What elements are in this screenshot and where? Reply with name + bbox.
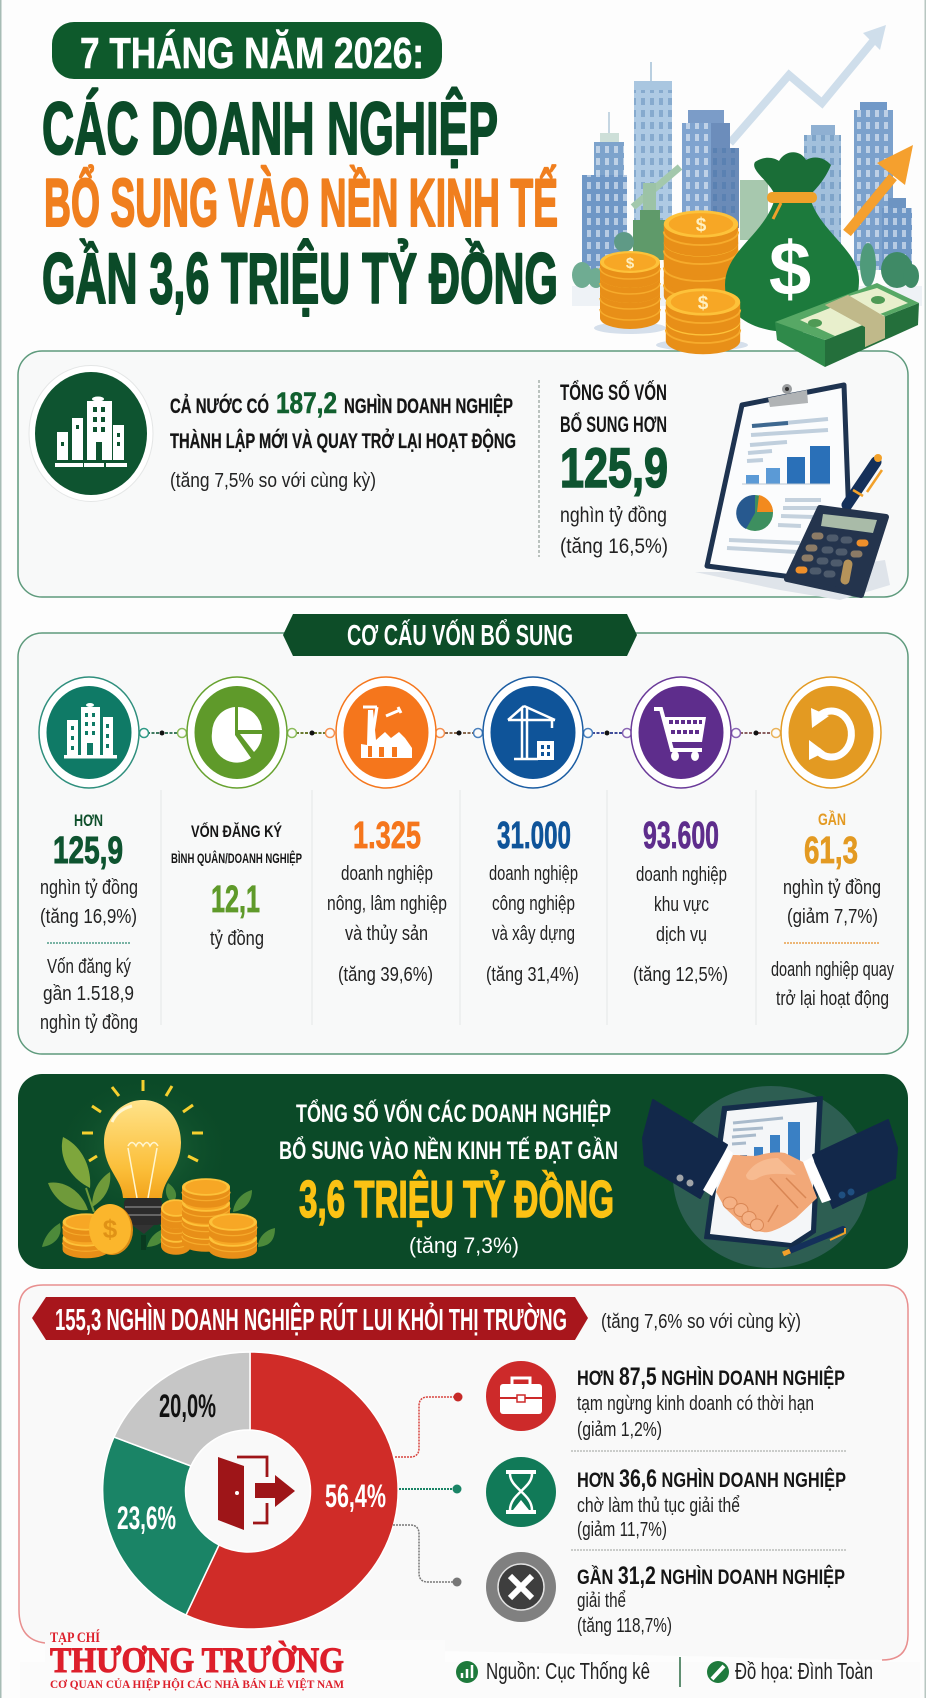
text: new business count: THÀNH LẬP MỚI VÀ QUAY TRỞ LẠI HOẠT ĐỘNG [170,429,516,453]
heading ribbon [32,1297,588,1340]
text: awaiting dissolution: chờ làm thủ tục giải thể [577,1495,740,1517]
logo: Thuong Truong magazine [50,1629,344,1691]
main title: GẦN 3,6 TRIỆU TỶ ĐỒNG [42,239,558,319]
logo: Thuong Truong magazine: CƠ QUAN CỦA HIỆP HỘI CÁC NHÀ BÁN LẺ VIỆT NAM [50,1677,344,1691]
text: total added capital: TỔNG SỐ VỐN [560,379,667,405]
text: new business count: CẢ NƯỚC CÓ [170,394,269,418]
main title [42,87,558,319]
text: total capital: TỔNG SỐ VỐN CÁC DOANH NGHIỆP [296,1098,611,1128]
column 2 [171,821,302,950]
donut chart: 20,0% [159,1388,216,1424]
column 1: nghìn tỷ đồng [40,877,138,899]
text: total added capital [560,379,668,558]
column 6: 61,3 [804,830,858,872]
connector lines [393,1392,462,1586]
text: awaiting dissolution: (giảm 11,7%) [577,1519,667,1541]
text: dissolved: giải thể [577,1590,626,1612]
title pill [52,22,442,79]
banner: total capital [18,1074,908,1269]
text: total capital: (tăng 7,3%) [409,1233,519,1258]
text: awaiting dissolution: HƠN 36,6 NGHÌN DOANH NGHIỆP [577,1465,846,1493]
column 4: (tăng 31,4%) [486,964,579,986]
column 2: VỐN ĐĂNG KÝ [191,821,282,841]
text: total added capital: nghìn tỷ đồng [560,504,667,527]
column 1: nghìn tỷ đồng [40,1012,138,1034]
text: new business count: (tăng 7,5% so với cùng kỳ) [170,470,376,492]
column 4 [486,815,579,986]
heading ribbon [283,614,637,656]
graphic credit: Đồ họa: Đình Toàn [735,1658,873,1684]
illustration: light bulb and coins: $ [103,1214,118,1244]
text: dissolved: GẦN 31,2 NGHÌN DOANH NGHIỆP [577,1562,845,1590]
illustration: city, coins, money bag and cash: $ [698,293,709,314]
text: total capital: BỔ SUNG VÀO NỀN KINH TẾ ĐẠT GẦN [279,1135,618,1165]
icon: exit door [218,1457,295,1530]
column 6: GẦN [818,810,846,829]
column 3: 1.325 [353,815,421,857]
column 2: tỷ đồng [210,928,264,950]
icon: buildings [29,366,153,502]
column 1 [40,811,138,1034]
column 3: (tăng 39,6%) [338,964,433,986]
column 5: (tăng 12,5%) [633,964,728,986]
column 5 [633,815,728,986]
illustration: handshake and documents [643,1086,897,1268]
source credit [456,1658,650,1684]
main title: CÁC DOANH NGHIỆP [42,87,498,170]
icon: factory [336,677,436,788]
column 3: và thủy sản [345,923,428,945]
text: total added capital: 125,9 [560,436,668,499]
text: dissolved [577,1562,845,1637]
illustration: light bulb and coins [42,1075,275,1259]
text: awaiting dissolution [577,1465,846,1541]
column 6: nghìn tỷ đồng [783,877,881,899]
column 4: 31.000 [497,815,571,857]
text: year over year: (tăng 7,6% so với cùng kỳ) [601,1311,801,1333]
graphic credit [707,1658,873,1684]
column 5: doanh nghiệp [636,864,727,886]
column 1: HƠN [74,811,103,830]
panel: new businesses [18,351,908,600]
source credit: Nguồn: Cục Thống kê [486,1658,650,1684]
text: total capital [279,1098,618,1258]
column 1: Vốn đăng ký [47,956,131,978]
text: dissolved: (tăng 118,7%) [577,1615,672,1637]
donut chart [103,1352,398,1629]
icon: hourglass [486,1457,556,1527]
column 3: doanh nghiệp [341,863,433,885]
column 4: công nghiệp [492,893,575,915]
text: new business count: NGHÌN DOANH NGHIỆP [344,394,513,418]
text: total added capital: BỔ SUNG HƠN [560,412,667,437]
icon: cancel [486,1552,556,1622]
text: new business count [170,387,516,492]
heading ribbon: 155,3 NGHÌN DOANH NGHIỆP RÚT LUI KHỎI THỊ TRƯỜNG [55,1301,567,1337]
column 1: 125,9 [53,830,123,872]
illustration: clipboard and calculator [695,384,890,600]
illustration: city, coins, money bag and cash [572,25,922,367]
donut chart: 23,6% [117,1500,176,1536]
title pill: 7 THÁNG NĂM 2026: [80,28,424,78]
column 1: gần 1.518,9 [43,983,134,1005]
column 4: doanh nghiệp [489,863,578,885]
icon: buildings [39,677,139,788]
panel: market exit [19,1285,920,1698]
logo: Thuong Truong magazine: TẠP CHÍ [50,1629,100,1646]
illustration: city, coins, money bag and cash: $ [626,255,635,272]
text: new business count: 187,2 [276,387,337,420]
illustration: city, coins, money bag and cash: $ [696,215,707,236]
heading ribbon: CƠ CẤU VỐN BỔ SUNG [347,618,573,652]
text: suspended: (giảm 1,2%) [577,1419,662,1441]
column 6: (giảm 7,7%) [787,906,878,928]
logo: Thuong Truong magazine: THƯƠNG TRƯỜNG [50,1640,344,1680]
icon: construction crane [483,677,583,788]
column 6 [771,810,894,1010]
column 1: (tăng 16,9%) [40,906,137,928]
column 2: BÌNH QUÂN/DOANH NGHIỆP [171,849,302,866]
icon: shopping cart [631,677,731,788]
text: total capital: 3,6 TRIỆU TỶ ĐỒNG [299,1170,614,1229]
column 5: 93.600 [643,815,719,857]
column 6: trở lại hoạt động [776,988,889,1010]
column 4: và xây dựng [492,923,575,945]
icon: return arrow [781,677,881,788]
text: suspended [577,1363,845,1441]
column 2: 12,1 [211,879,260,921]
icon: pie chart [187,677,287,788]
text: suspended: tạm ngừng kinh doanh có thời hạn [577,1393,814,1415]
column 3: nông, lâm nghiệp [327,893,447,915]
column 5: dịch vụ [656,924,707,946]
text: total added capital: (tăng 16,5%) [560,535,668,558]
text: suspended: HƠN 87,5 NGHÌN DOANH NGHIỆP [577,1363,845,1391]
illustration: city, coins, money bag and cash: $ [769,227,811,312]
column 3 [327,815,447,986]
panel: capital structure [18,614,908,1054]
column 5: khu vực [654,894,709,916]
donut chart: 56,4% [325,1478,386,1514]
icon: briefcase [486,1361,556,1431]
